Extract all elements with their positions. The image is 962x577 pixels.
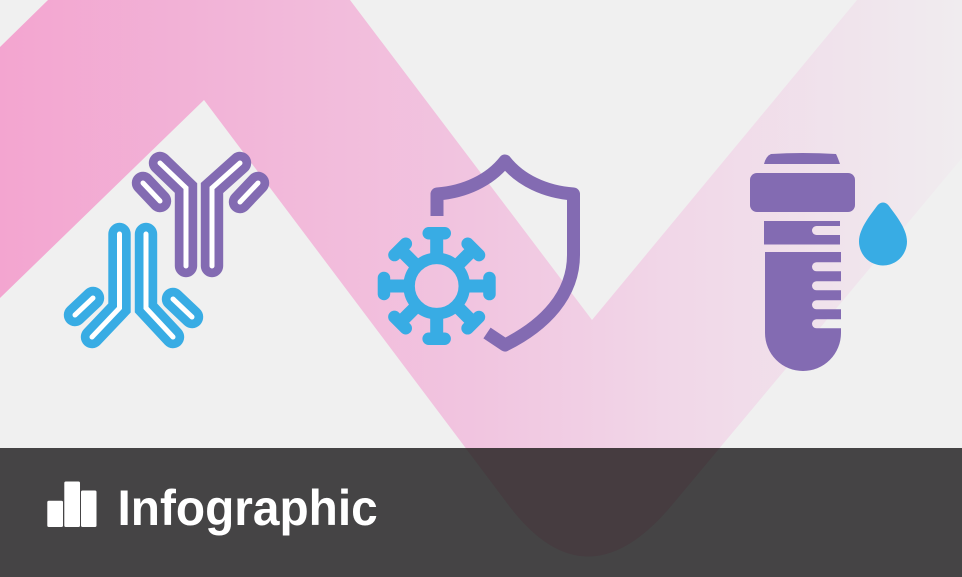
icon: blue antibody (75, 234, 192, 337)
icon: virus (378, 227, 496, 345)
icon: purple antibody (143, 163, 258, 266)
icon: shield (437, 161, 574, 345)
footer bar (0, 448, 962, 577)
icon: blood drop (859, 202, 907, 266)
icon: test tube (750, 153, 855, 371)
band overlap in footer (467, 450, 714, 556)
footer label: Infographic (118, 481, 378, 536)
icon: bar chart (47, 482, 96, 527)
